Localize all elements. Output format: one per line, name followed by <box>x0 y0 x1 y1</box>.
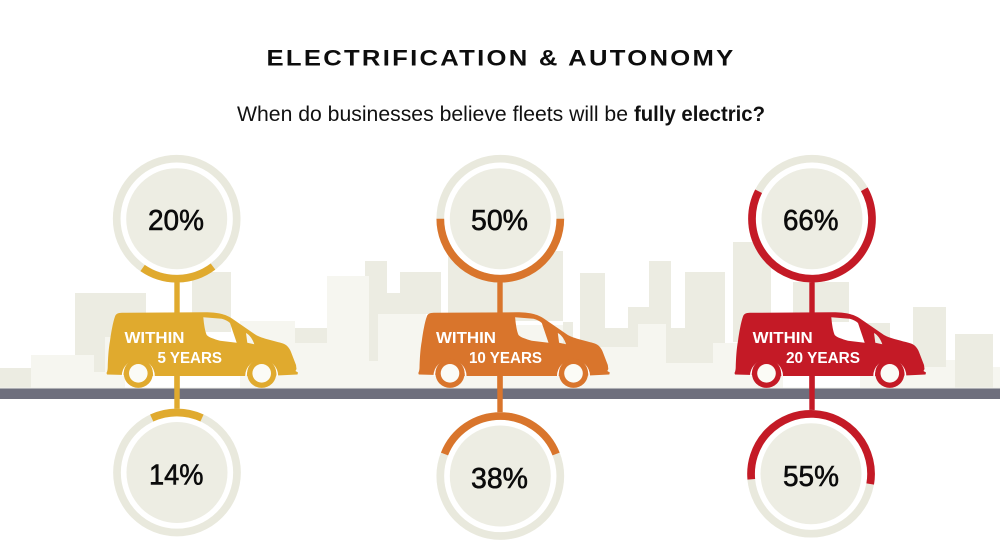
van: orange: WITHIN <box>436 330 496 347</box>
donut chart: 38% <box>440 416 560 536</box>
van: orange: 10 YEARS <box>469 350 542 367</box>
title: ELECTRIFICATION & AUTONOMY <box>266 46 736 70</box>
connector stem <box>809 276 815 416</box>
donut chart: 14% <box>117 412 237 532</box>
column: within 5 years <box>106 159 298 532</box>
subtitle question: fully electric? <box>634 103 765 126</box>
connector stem <box>497 276 503 416</box>
van: yellow: 5 YEARS <box>158 350 222 367</box>
donut chart: 38%: 38% <box>471 463 528 495</box>
van: red: 20 YEARS <box>786 350 860 367</box>
lower stem over van <box>174 376 180 388</box>
donut chart: 66% <box>752 159 872 279</box>
connector stem <box>174 276 180 421</box>
donut chart: 55% <box>751 414 871 534</box>
donut chart: 50%: 50% <box>471 205 528 237</box>
donut chart: 14%: 14% <box>149 460 204 492</box>
lower stem over van <box>809 376 815 388</box>
column: within 10 years <box>418 159 610 536</box>
road <box>0 388 1000 399</box>
van: yellow <box>106 312 298 388</box>
van: red: WITHIN <box>753 330 813 347</box>
donut chart: 20%: 20% <box>148 205 204 237</box>
city skyline <box>0 242 1000 389</box>
donut chart: 66%: 66% <box>783 205 838 237</box>
donut chart: 50% <box>440 159 560 279</box>
lower stem over van <box>497 376 503 388</box>
column: within 20 years <box>734 159 926 534</box>
van: red <box>734 312 926 388</box>
subtitle question: When do businesses believe fleets will be <box>237 103 628 126</box>
van: yellow: WITHIN <box>124 330 184 347</box>
donut chart: 55%: 55% <box>783 461 839 493</box>
van: orange <box>418 312 610 388</box>
donut chart: 20% <box>117 159 237 279</box>
